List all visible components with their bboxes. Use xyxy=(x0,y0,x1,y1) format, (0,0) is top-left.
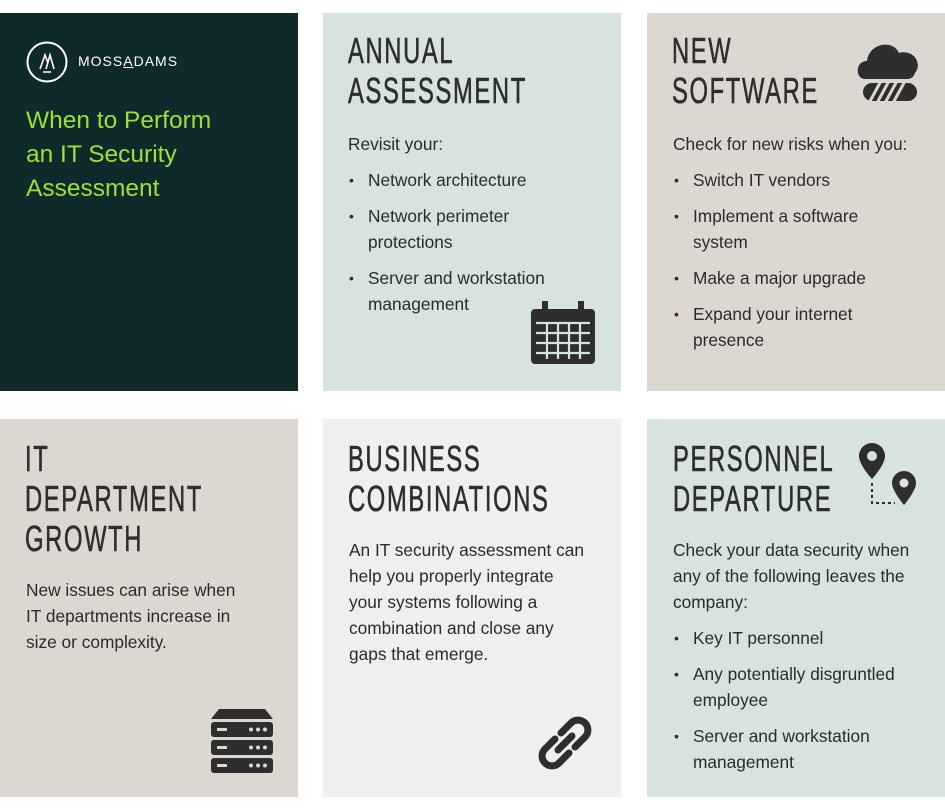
text: Key IT personnel xyxy=(693,628,823,648)
text: Revisit your: xyxy=(348,134,443,154)
panel: intro xyxy=(0,13,298,391)
heading: SOFTWARE xyxy=(672,70,819,111)
icon: server xyxy=(211,709,273,773)
icon: map pins xyxy=(859,443,916,505)
text: Any potentially disgruntled employee xyxy=(693,664,895,710)
text: New issues can arise when IT departments increase in size or complexity. xyxy=(26,580,235,652)
text: Make a major upgrade xyxy=(693,268,866,288)
text: Network architecture xyxy=(368,170,526,190)
title: an IT Security xyxy=(26,141,177,168)
text xyxy=(673,540,909,772)
text: Check for new risks when you: xyxy=(673,134,907,154)
text: Network perimeter protections xyxy=(368,206,509,252)
icon: chain link xyxy=(538,716,592,770)
heading xyxy=(673,438,834,519)
heading: GROWTH xyxy=(25,518,143,559)
heading: COMBINATIONS xyxy=(348,478,550,519)
heading xyxy=(348,438,550,519)
title: When to Perform xyxy=(26,107,211,134)
text xyxy=(673,134,907,350)
title: Assessment xyxy=(26,175,159,202)
panel: IT department growth xyxy=(0,419,298,797)
heading: BUSINESS xyxy=(348,438,481,479)
heading xyxy=(672,30,819,111)
logo: MOSSADAMS xyxy=(78,53,178,69)
title xyxy=(26,107,211,202)
panel: personnel departure xyxy=(647,419,945,797)
text: An IT security assessment can help you properly integrate your systems following a combination and close any gaps that emerge. xyxy=(349,540,584,664)
heading xyxy=(25,438,203,559)
text: Implement a software system xyxy=(693,206,858,252)
icon: cloud xyxy=(858,44,918,101)
panel: annual assessment xyxy=(323,13,621,391)
heading: ASSESSMENT xyxy=(348,70,527,111)
panel: business combinations xyxy=(323,419,621,797)
text: Server and workstation management xyxy=(693,726,870,772)
heading: PERSONNEL xyxy=(673,438,834,479)
text: Expand your internet presence xyxy=(693,304,852,350)
heading: DEPARTURE xyxy=(673,478,832,519)
heading xyxy=(348,30,527,111)
heading: IT xyxy=(25,438,49,479)
text: Switch IT vendors xyxy=(693,170,830,190)
text: Server and workstation management xyxy=(368,268,545,314)
logo xyxy=(26,42,178,82)
heading: NEW xyxy=(672,30,732,71)
heading: ANNUAL xyxy=(348,30,454,71)
icon: calendar xyxy=(531,301,595,364)
panel: new software xyxy=(647,13,945,391)
text xyxy=(348,134,545,314)
heading: DEPARTMENT xyxy=(25,478,203,519)
text: Check your data security when any of the following leaves the company: xyxy=(673,540,909,612)
